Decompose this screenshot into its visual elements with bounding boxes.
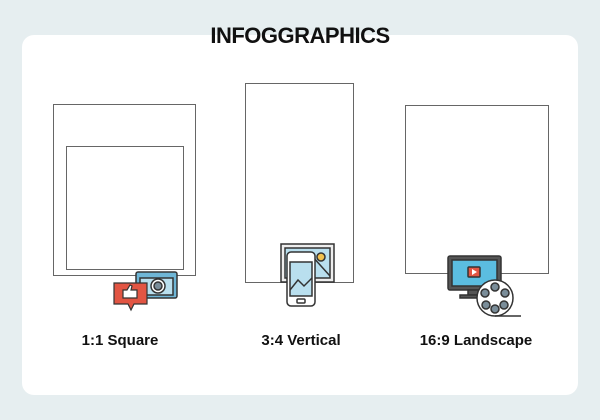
label: vertical: 3:4 Vertical (261, 332, 341, 349)
icon: like bubble (114, 283, 147, 310)
icon: camera (136, 272, 177, 298)
label: square: 1:1 Square (82, 332, 158, 349)
panel: vertical (246, 84, 354, 282)
icon: film reel (477, 280, 521, 316)
card (22, 35, 578, 395)
label: landscape: 16:9 Landscape (420, 332, 532, 349)
icon: monitor (448, 256, 501, 298)
panel: square (54, 104, 196, 276)
panel: landscape (406, 106, 548, 274)
title: INFOGGRAPHICS (210, 23, 390, 48)
icon: image frame with phone (281, 244, 334, 306)
